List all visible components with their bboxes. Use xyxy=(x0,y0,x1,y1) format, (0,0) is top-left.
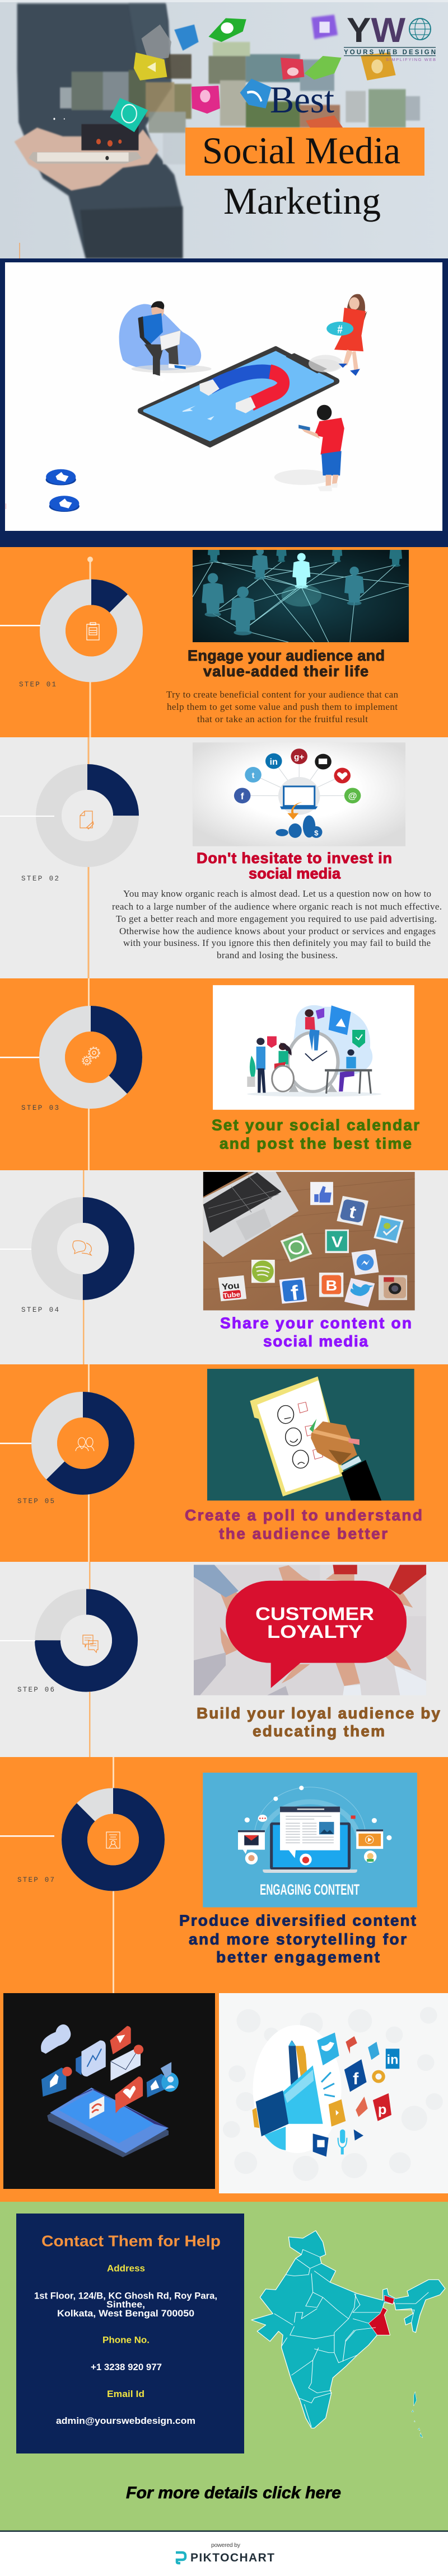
image: poll paper and hand xyxy=(207,1369,414,1500)
cube icons: t xyxy=(347,1202,358,1222)
heading: social media xyxy=(263,1332,368,1350)
icon: message cards xyxy=(83,1635,98,1652)
heading xyxy=(188,647,385,680)
heading: Don't hesitate to invest in xyxy=(197,850,392,866)
body text: To get a better reach and more engagement you required to use paid advertising. xyxy=(116,913,437,924)
beanbag man with laptop xyxy=(119,301,212,382)
address xyxy=(34,2263,217,2319)
like discs xyxy=(46,469,80,512)
cube icons: B xyxy=(326,1277,337,1294)
image: customer loyalty speech bubble: LOYALTY xyxy=(267,1622,362,1642)
phone xyxy=(91,2335,162,2372)
icon: chat bubbles xyxy=(73,1241,91,1255)
heading xyxy=(212,1117,419,1152)
image tile: megaphone and social icons xyxy=(219,1993,448,2193)
heading xyxy=(220,1315,412,1350)
body text xyxy=(166,689,399,724)
icon: certificate xyxy=(106,1832,120,1848)
floating app icons xyxy=(53,15,396,132)
contact section xyxy=(0,2202,448,2531)
donut chart step 6 xyxy=(48,1602,125,1679)
image: customer loyalty speech bubble: CUSTOMER xyxy=(255,1604,374,1624)
header panel xyxy=(0,0,448,262)
icon: clipboard xyxy=(87,623,99,640)
email: Email Id xyxy=(107,2389,144,2399)
body text: Otherwise how the audience knows about your product or services and engages xyxy=(119,926,436,936)
image: engaging content: ENGAGING CONTENT xyxy=(260,1881,360,1898)
cube icons: You xyxy=(221,1281,240,1292)
heading: better engagement xyxy=(216,1948,380,1966)
step label 03: STEP 03 xyxy=(21,1104,59,1112)
donut chart step 5 xyxy=(44,1405,122,1482)
donut chart step 4 xyxy=(44,1210,122,1287)
step 2 panel xyxy=(0,737,448,978)
step label 06: STEP 06 xyxy=(17,1686,54,1694)
image: social hub: in xyxy=(270,757,278,767)
header photo: businessman holding phone with floating icons xyxy=(15,3,420,258)
phone: +1 3238 920 977 xyxy=(91,2362,162,2372)
cube icons: Tube xyxy=(223,1291,241,1299)
body text: with your business. If you ignore this then definitely you may fail to build the xyxy=(123,938,431,948)
logo: Yours Web Design xyxy=(344,11,436,62)
image: social hub xyxy=(193,742,405,846)
heading: the audience better xyxy=(219,1525,388,1542)
image: engaging content xyxy=(203,1773,417,1908)
phone with magnet xyxy=(140,349,340,445)
icon: document and pencil xyxy=(80,811,94,829)
email xyxy=(56,2389,195,2426)
address: Sinthee, xyxy=(106,2299,145,2310)
call to action: For more details click here xyxy=(126,2484,341,2502)
icon: gears xyxy=(82,1047,100,1065)
photo: social media cubes on wood desk xyxy=(203,1172,415,1310)
woman with hashtag disc xyxy=(309,294,367,376)
powered by: powered by xyxy=(211,2542,241,2549)
body text: that or take an action for the fruitful result xyxy=(197,714,368,724)
donut chart step 3 xyxy=(52,1019,129,1096)
step 4 panel xyxy=(0,1170,448,1364)
address: 1st Floor, 124/B, KC Ghosh Rd, Roy Para, xyxy=(34,2290,217,2301)
social icon cluster: in xyxy=(387,2052,398,2067)
donut chart step 2 xyxy=(49,777,126,854)
phone: Phone No. xyxy=(102,2335,150,2346)
photo: people network xyxy=(193,550,409,642)
body text: brand and losing the business. xyxy=(217,950,338,960)
heading: educating them xyxy=(253,1722,385,1740)
title word: Marketing: Marketing xyxy=(223,180,381,222)
step label 01: STEP 01 xyxy=(19,681,56,689)
step 6 panel xyxy=(0,1562,448,1757)
address: Kolkata, West Bengal 700050 xyxy=(57,2308,194,2319)
hero panel: magnet phone illustration xyxy=(0,258,448,547)
heading xyxy=(179,1912,416,1966)
cube icons: V xyxy=(332,1234,343,1251)
piktochart wordmark: PIKTOCHART xyxy=(190,2551,274,2564)
image: social hub: $ xyxy=(314,829,319,837)
social icon cluster xyxy=(313,2033,399,2156)
piktochart logo icon xyxy=(176,2553,185,2563)
donut chart step 7 xyxy=(74,1801,152,1878)
heading xyxy=(197,850,392,882)
heading: Build your loyal audience by xyxy=(197,1704,440,1722)
image: social calendar clock xyxy=(213,985,414,1110)
social icon cluster: f xyxy=(353,2070,359,2088)
body text: You may know organic reach is almost dead. Let us a question now on how to xyxy=(123,888,431,899)
heading xyxy=(197,1704,440,1740)
map of India xyxy=(251,2231,445,2438)
step 7 panel xyxy=(0,1757,448,2202)
heading: Create a poll to understand xyxy=(185,1506,422,1524)
logo: Yours Web Design: SIMPLIFYING WEB xyxy=(386,57,436,62)
step label 07: STEP 07 xyxy=(17,1876,54,1884)
contact heading: Contact Them for Help xyxy=(41,2232,221,2250)
heading xyxy=(185,1506,422,1542)
body text xyxy=(112,888,442,960)
icon: two people xyxy=(76,1438,94,1451)
social icon cluster: p xyxy=(378,2102,386,2117)
image: customer loyalty speech bubble xyxy=(194,1565,426,1696)
step label 02: STEP 02 xyxy=(21,875,59,883)
donut chart step 1 xyxy=(53,592,130,669)
image: social hub: @ xyxy=(348,791,357,801)
title word: Best: Best xyxy=(270,78,334,121)
heading: Produce diversified content xyxy=(179,1912,416,1929)
logo: Yours Web Design: YOURS WEB DESIGN xyxy=(344,49,436,56)
step 1 panel xyxy=(0,539,448,737)
step 5 panel xyxy=(0,1364,448,1562)
body text: help them to get some value and push them to implement xyxy=(167,701,398,712)
contact card xyxy=(16,2214,244,2453)
figures xyxy=(247,1005,372,1094)
image: social hub: t xyxy=(251,771,255,780)
step 3 panel xyxy=(0,978,448,1170)
cube icons: f xyxy=(290,1282,300,1305)
title highlight: Social Media: Social Media xyxy=(202,129,400,172)
image: social hub: g+ xyxy=(294,752,304,762)
man in red shirt xyxy=(274,405,344,491)
heading: and post the best time xyxy=(220,1134,412,1152)
heading: value-added their life xyxy=(203,663,368,680)
cube icons xyxy=(218,1182,407,1307)
heading: social media xyxy=(249,865,341,882)
email: admin@yourswebdesign.com xyxy=(56,2415,195,2426)
step label 05: STEP 05 xyxy=(17,1497,54,1505)
heading: and more storytelling for xyxy=(189,1930,407,1948)
image tile: isometric phone on black xyxy=(3,1993,215,2189)
woman with hashtag disc: # xyxy=(337,323,343,337)
step label 04: STEP 04 xyxy=(21,1306,59,1314)
logo: Yours Web Design: YW xyxy=(347,11,405,50)
heading: Set your social calendar xyxy=(212,1117,419,1133)
body text: reach to a large number of the audience where organic reach is not much effective. xyxy=(112,901,442,912)
heading: Engage your audience and xyxy=(188,647,385,664)
heading: Share your content on xyxy=(220,1315,412,1331)
body text: Try to create beneficial content for your audience that can xyxy=(166,689,399,700)
address: Address xyxy=(107,2263,145,2273)
footer xyxy=(0,2531,448,2576)
image: social hub: f xyxy=(241,790,244,802)
